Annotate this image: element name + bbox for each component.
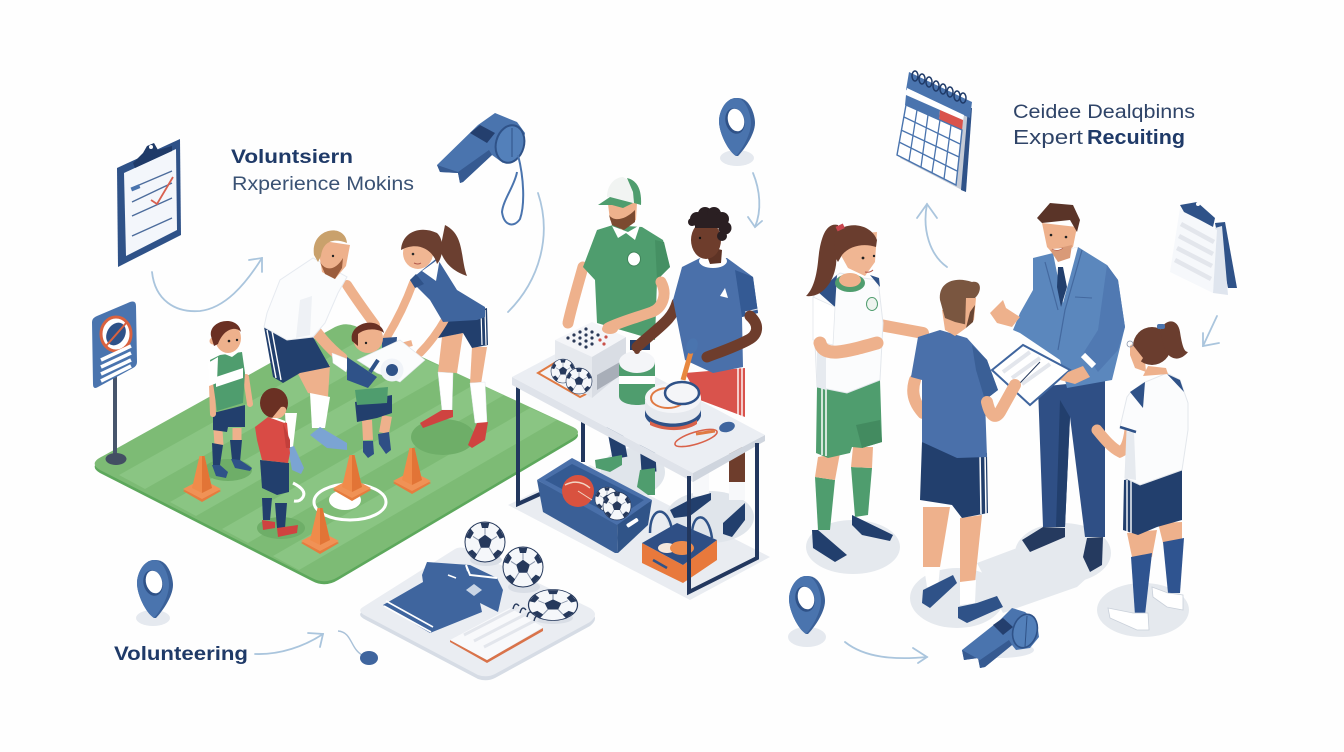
icon: footballs	[465, 522, 578, 624]
heading: Expert Recuiting: Expert	[1013, 127, 1084, 149]
icon: location pin top	[719, 98, 755, 166]
shadow: volunteer feet	[601, 448, 754, 543]
person: woman in blue coaching	[387, 225, 488, 448]
arrow: clipboard to coach	[152, 258, 262, 311]
person: kid in green	[208, 321, 252, 478]
cones	[183, 448, 431, 554]
person: coach in white	[264, 230, 375, 474]
person: woman with ponytail	[806, 223, 923, 562]
arrow: curved connector	[508, 193, 544, 312]
icon: clipboard with checklist	[117, 139, 181, 267]
icon: green container	[619, 348, 655, 405]
panel: training pitch	[95, 324, 578, 584]
arrow: pin to table	[748, 173, 762, 227]
label: Volunteering: Volunteering	[114, 643, 248, 665]
person: girl in white	[1097, 321, 1188, 630]
heading: Voluntsiern: Voluntsiern	[231, 147, 353, 168]
floor shadows: recruiting group	[806, 520, 1189, 637]
icon: whistle	[437, 113, 528, 224]
icon: notebook	[450, 604, 543, 663]
arrow: to equipment	[255, 633, 323, 654]
panel: equipment tray	[360, 548, 595, 680]
icon: warning sign	[92, 302, 137, 465]
icon: wall calendar	[897, 71, 972, 192]
person: volunteer in blue tee	[637, 207, 758, 537]
icon: location pin lower	[788, 576, 826, 647]
icon: orange pump	[683, 337, 700, 380]
panel: table floor shadow	[508, 465, 770, 600]
arrow: up to calendar	[917, 204, 947, 267]
icon: location pin left	[136, 560, 173, 626]
heading: Voluntsiern: Rxperience Mokins	[232, 174, 414, 195]
panel: volunteer table	[512, 339, 765, 592]
person: boy holding ball	[347, 323, 425, 458]
icon: blue crate with balls	[537, 458, 652, 553]
icon: control box	[551, 322, 626, 398]
person: man with clipboard	[911, 280, 1094, 623]
icon: jersey	[383, 562, 503, 633]
icon: skipping rope whisk	[673, 420, 736, 450]
heading: Expert Recuiting	[1013, 102, 1195, 149]
arrow: bottom right	[845, 642, 927, 663]
person: volunteer in green polo	[568, 177, 670, 495]
heading: Expert Recuiting: Ceidee Dealqbinns	[1013, 102, 1195, 123]
arrow: notepad	[1203, 316, 1219, 346]
panel: volunteer table legs back	[581, 420, 585, 462]
icon: cord and fob	[338, 631, 378, 665]
icon: orange basket	[642, 476, 717, 592]
person: man in blue suit	[990, 203, 1125, 572]
heading: Voluntsiern	[231, 147, 414, 195]
icon: notepad right	[1170, 202, 1237, 295]
person: kid in red	[255, 388, 298, 537]
heading: Expert Recuiting: Recuiting	[1087, 127, 1185, 149]
icon: stacked discs	[645, 382, 701, 430]
icon: whistle lower	[962, 608, 1041, 668]
hand over box	[602, 324, 618, 334]
icon: orange tray with balls	[538, 362, 590, 397]
